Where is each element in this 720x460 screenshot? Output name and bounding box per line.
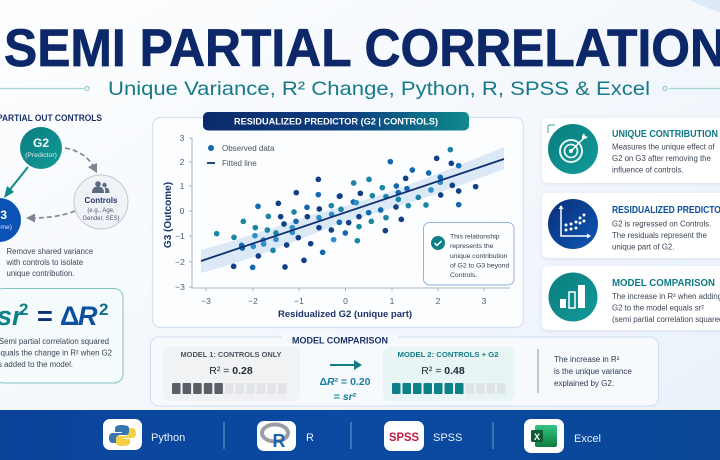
callout bbox=[424, 222, 514, 285]
legend bbox=[207, 144, 275, 168]
formula caption: Semi partial correlation squared bbox=[0, 337, 109, 346]
icon: people bbox=[92, 181, 110, 193]
icon: target bbox=[548, 124, 598, 174]
icon: bars bbox=[548, 272, 598, 322]
callout: This relationship bbox=[450, 234, 500, 240]
scatter points left bbox=[214, 176, 342, 270]
y axis tick labels: 1 bbox=[180, 181, 185, 191]
y axis tick labels: −2 bbox=[175, 257, 185, 267]
node: G2 predictor: (Predictor) bbox=[25, 152, 57, 159]
model 1 box: R² = 0.28 bbox=[209, 365, 253, 377]
panel: unique contribution: G2 on G3 after removing the bbox=[612, 154, 711, 163]
y axis tick labels bbox=[175, 133, 185, 292]
formula: 2 bbox=[99, 300, 108, 319]
model 1 box bbox=[163, 347, 300, 401]
heading: partial out controls: PARTIAL OUT CONTROLS bbox=[0, 113, 103, 124]
scatter points right bbox=[337, 147, 478, 243]
confidence band bbox=[201, 147, 504, 273]
heading: MODEL COMPARISON bbox=[292, 336, 388, 346]
panel: model comparison card bbox=[542, 266, 720, 330]
model 2 box: R² = 0.48 bbox=[421, 365, 465, 377]
text: increase in R2 bbox=[554, 355, 632, 388]
formula: R bbox=[78, 301, 98, 331]
panel: residualized predictor bbox=[542, 193, 720, 258]
label: python: Python bbox=[151, 432, 185, 444]
panel: partial out controls bbox=[0, 113, 128, 278]
y axis tick labels: −3 bbox=[175, 282, 185, 292]
panel: unique contribution bbox=[542, 118, 720, 183]
x axis tick labels: 1 bbox=[390, 296, 395, 306]
y axis tick labels: −1 bbox=[175, 231, 185, 241]
icon: scatter axes bbox=[548, 199, 598, 249]
node: controls: (e.g., Age, bbox=[87, 208, 115, 214]
x axis tick labels: 2 bbox=[436, 296, 441, 306]
legend: Observed data bbox=[222, 144, 275, 153]
icon: python bbox=[103, 419, 142, 450]
model 2 box: MODEL 2: CONTROLS + G2 bbox=[398, 350, 498, 359]
panel: unique contribution: influence of controls. bbox=[612, 166, 684, 174]
x axis tick labels: 3 bbox=[482, 296, 487, 306]
x axis tick labels: −1 bbox=[294, 296, 304, 306]
delta label: = sr² bbox=[334, 391, 357, 403]
panel: model comparison card: G2 to the model equals sr² bbox=[612, 304, 704, 312]
model 2 box bbox=[383, 347, 515, 401]
model 1 box: MODEL 1: CONTROLS ONLY bbox=[180, 350, 282, 359]
heading pill bbox=[203, 112, 469, 130]
arrow: Controls to G3 bbox=[26, 211, 75, 222]
arrow: G2 to G3 bbox=[4, 167, 28, 198]
formula: = bbox=[37, 301, 53, 331]
node: G2 predictor: G2 bbox=[33, 136, 49, 150]
callout: unique contribution bbox=[450, 253, 508, 260]
x axis tick labels: 0 bbox=[343, 296, 348, 306]
node: controls: Gender, SES) bbox=[82, 216, 120, 222]
y axis tick labels: 2 bbox=[180, 157, 185, 167]
label: R: R bbox=[306, 432, 314, 444]
delta label bbox=[319, 376, 371, 403]
node: controls: Controls bbox=[85, 196, 118, 205]
y axis tick labels: 0 bbox=[180, 206, 185, 216]
icon: Excel bbox=[524, 419, 564, 453]
label: Excel: Excel bbox=[574, 433, 601, 445]
node: G3 outcome bbox=[0, 198, 21, 242]
x axis tick labels: −2 bbox=[248, 296, 258, 306]
icon: SPSS: SPSS bbox=[389, 430, 419, 444]
panel: residualized predictor: The residuals represent the bbox=[612, 231, 707, 240]
delta label: ΔR² = 0.20 bbox=[319, 376, 371, 388]
callout: Controls. bbox=[450, 272, 477, 279]
text: increase in R2: explained by G2. bbox=[554, 379, 614, 388]
panel: model comparison bbox=[150, 334, 658, 406]
fitted line bbox=[201, 159, 504, 261]
icon: Excel: X bbox=[534, 432, 540, 442]
text: remove shared variance: with controls to isolate bbox=[6, 258, 83, 267]
x axis tick labels: −3 bbox=[201, 296, 211, 306]
node: controls bbox=[74, 175, 128, 229]
formula caption bbox=[0, 337, 112, 369]
footer bbox=[0, 410, 720, 460]
panel: unique contribution: Measures the unique effect of bbox=[612, 142, 715, 152]
y axis tick labels: 3 bbox=[180, 133, 185, 143]
node: G2 predictor bbox=[20, 127, 62, 169]
panel: residualized predictor: G2 is regressed on Controls. bbox=[612, 220, 711, 228]
text: increase in R2: The increase in R² bbox=[554, 355, 620, 364]
subtitle: Unique Variance, R² Change, Python, R, SPSS & Excel bbox=[108, 78, 650, 100]
heading pill: RESIDUALIZED PREDICTOR (G2 | CONTROLS) bbox=[234, 116, 438, 128]
panel: formula bbox=[0, 288, 123, 383]
icon: R bbox=[257, 421, 296, 451]
formula: Δ bbox=[60, 301, 79, 331]
arrow: G2 to Controls bbox=[65, 148, 97, 173]
panel: model comparison card: The increase in R² when adding bbox=[612, 292, 720, 301]
text: remove shared variance bbox=[6, 247, 93, 278]
x axis tick labels bbox=[201, 296, 487, 306]
axes bbox=[189, 138, 510, 291]
x axis title: Residualized G2 (unique part) bbox=[278, 309, 412, 320]
panel: residualized predictor: unique part of G2. bbox=[612, 242, 674, 252]
label: SPSS: SPSS bbox=[433, 432, 462, 444]
subtitle bbox=[0, 78, 720, 100]
y axis title: G3 (Outcome) bbox=[163, 182, 174, 248]
icon: R: R bbox=[272, 431, 286, 451]
panel: residualized scatter chart bbox=[152, 112, 524, 328]
text: remove shared variance: unique contribution. bbox=[6, 269, 75, 278]
callout: of G2 to G3 beyond bbox=[450, 262, 510, 270]
legend: Fitted line bbox=[222, 159, 257, 168]
text: increase in R2: is the unique variance bbox=[554, 367, 632, 376]
callout: represents the bbox=[450, 243, 494, 250]
text: remove shared variance: Remove shared variance bbox=[6, 247, 93, 256]
icon: check bbox=[431, 236, 445, 250]
formula: 2 bbox=[19, 300, 28, 319]
icon: SPSS bbox=[384, 421, 424, 451]
arrow: model 1 to model 2 bbox=[330, 360, 362, 370]
